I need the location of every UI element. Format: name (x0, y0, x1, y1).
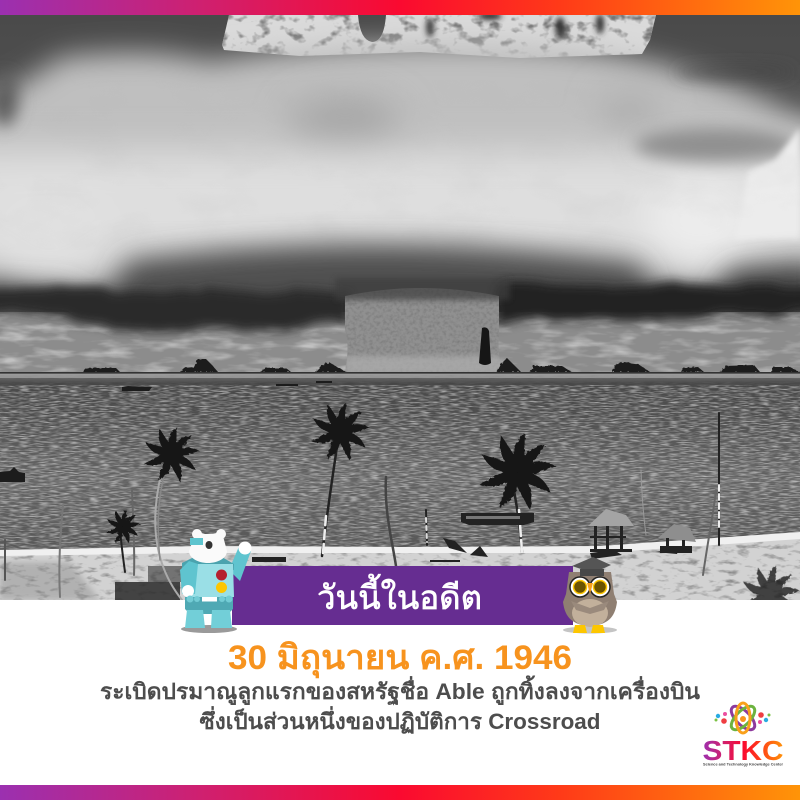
mushroom cloud crown (222, 15, 656, 58)
banner: วันนี้ในอดีต: วันนี้ในอดีต (317, 574, 482, 616)
dark cloud bands beside stem (0, 285, 800, 333)
beach (0, 532, 800, 600)
boats (0, 381, 332, 482)
lower horizon clouds (0, 312, 800, 375)
top gradient bar (0, 0, 800, 15)
icon: atom (714, 702, 770, 734)
cloud dark underside (0, 244, 800, 330)
description text: ซึ่งเป็นส่วนหนึ่งของปฏิบัติการ Crossroad (200, 705, 600, 734)
icon: owl mascot with graduation cap (563, 557, 617, 634)
sea (0, 372, 800, 562)
fleet on the horizon (82, 358, 800, 372)
main cloud mass (0, 43, 800, 280)
description text: ระเบิดปรมาณูลูกแรกของสหรัฐชื่อ Able ถูกทิ้งลงจากเครื่องบิน (100, 675, 700, 706)
palm crowns (106, 403, 800, 600)
date heading: 30 มิถุนายน ค.ศ. 1946 (228, 639, 572, 679)
cloud texture (0, 80, 800, 250)
logo: STKC: Science and Technology Knowledge Center (703, 762, 784, 766)
bright cloud edge at right (747, 128, 800, 240)
photo: atomic bomb test over lagoon (0, 12, 800, 625)
description text (100, 675, 700, 734)
water column stem (335, 278, 510, 375)
arm raised (229, 544, 251, 581)
jetty and huts (461, 509, 696, 553)
white lower panel (0, 600, 800, 785)
sky (0, 15, 800, 312)
icon: polar bear mascot (180, 529, 252, 633)
logo: STKC (702, 702, 784, 766)
logo: STKC: STKC (702, 735, 784, 766)
banner: วันนี้ในอดีต (232, 566, 573, 625)
palm trees and poles (5, 413, 719, 600)
bottom gradient bar (0, 785, 800, 800)
